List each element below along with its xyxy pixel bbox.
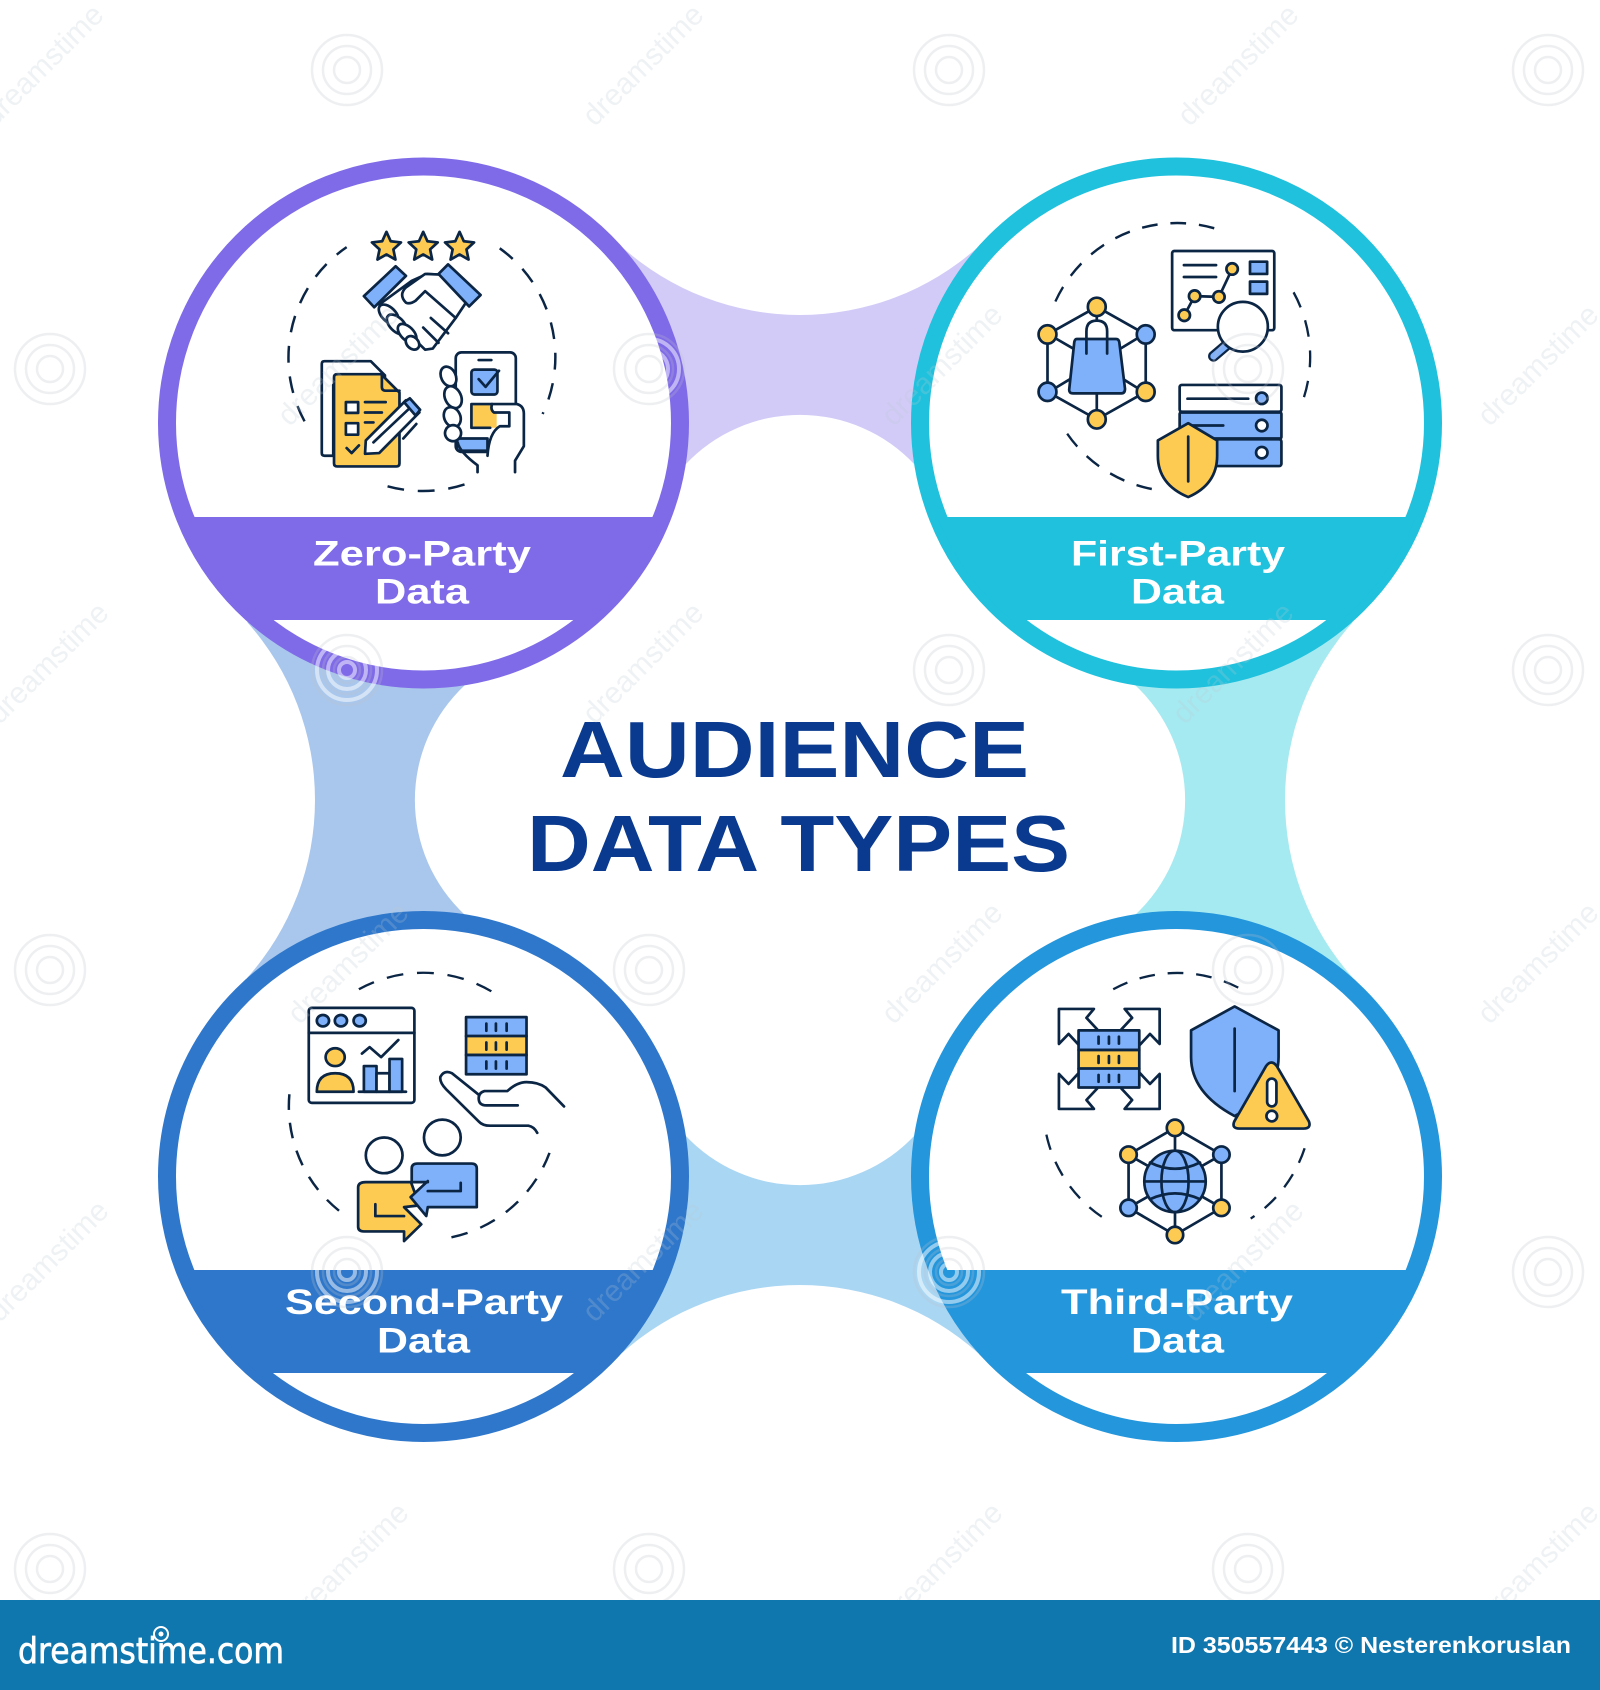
- text: dreamstime: [576, 596, 710, 730]
- icon: dashboard, shared server and people exchange: [289, 973, 564, 1241]
- label: second-party data: Second-Party: [285, 1283, 564, 1322]
- panel: first-party data: [903, 166, 1451, 680]
- text: dreamstime: [1166, 596, 1300, 730]
- footer credit: ID 350557443 © Nesterenkoruslan: [1171, 1632, 1571, 1658]
- label: third-party data: [1061, 1283, 1294, 1360]
- text: dreamstime: [875, 298, 1009, 432]
- ring: second-party: [167, 920, 680, 1433]
- ring: zero-party: [167, 166, 680, 680]
- banner: second-party: [194, 1270, 653, 1373]
- label: second-party data: Data: [377, 1322, 471, 1360]
- label: zero-party data: Zero-Party: [313, 534, 532, 574]
- title: DATA TYPES: [527, 799, 1070, 888]
- label: second-party data: [285, 1283, 564, 1360]
- icon: expanding server, warning shield and global network: [1045, 973, 1310, 1243]
- label: third-party data: Third-Party: [1061, 1283, 1294, 1322]
- connector: right cyan band: [1135, 622, 1353, 978]
- connector: left blue band: [247, 622, 465, 978]
- banner: first-party: [948, 517, 1406, 620]
- text: dreamstime: [281, 1496, 415, 1630]
- connector: bottom light-blue band: [622, 1135, 978, 1353]
- label: zero-party data: [313, 534, 532, 612]
- panel: second-party data: [150, 920, 698, 1433]
- panel: third-party data: [903, 920, 1451, 1433]
- panel: zero-party data: [150, 166, 698, 680]
- icon: shopping network, analytics and secure server: [1039, 223, 1310, 497]
- banner: third-party: [947, 1270, 1406, 1373]
- title: [527, 705, 1070, 888]
- ring: third-party: [920, 920, 1433, 1433]
- label: zero-party data: Data: [375, 572, 470, 612]
- label: third-party data: Data: [1131, 1322, 1225, 1360]
- footer bar: [0, 1600, 1600, 1690]
- text: dreamstime: [281, 896, 415, 1030]
- text: dreamstime: [875, 896, 1009, 1030]
- banner: zero-party: [194, 517, 652, 620]
- text: dreamstime: [576, 1194, 710, 1328]
- icon: handshake, survey form and phone: [288, 232, 555, 491]
- text: dreamstime: [271, 298, 405, 432]
- text: dreamstime: [576, 0, 710, 132]
- label: first-party data: [1071, 534, 1286, 612]
- title: AUDIENCE: [560, 705, 1029, 794]
- footer logo: dreamstime.com: [18, 1631, 284, 1672]
- text: dreamstime: [1171, 0, 1305, 132]
- label: first-party data: First-Party: [1071, 534, 1286, 574]
- label: first-party data: Data: [1131, 572, 1225, 612]
- text: dreamstime: [875, 1496, 1009, 1630]
- connector: top purple band: [622, 247, 978, 465]
- text: dreamstime: [1176, 1194, 1310, 1328]
- ring: first-party: [920, 166, 1433, 680]
